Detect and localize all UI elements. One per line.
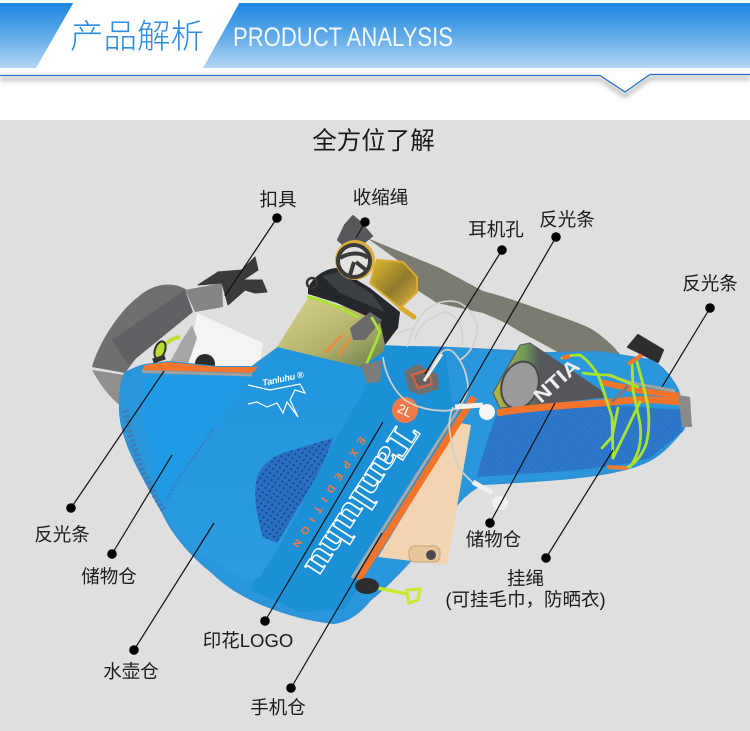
bottle neck cord [308,297,357,317]
phone camera [409,546,440,562]
right tab [678,395,692,427]
callout: 储物仓 left: 储物仓 [81,566,137,587]
left pocket piping [125,410,165,512]
callout: 手机仓 [250,533,382,718]
right pocket zipper [497,375,680,413]
waist bag illustration [92,216,692,623]
hanging cords [562,355,649,468]
callout: 反光条 middle [460,209,595,403]
cord stopper [628,335,663,364]
callout: 水壶仓: 水壶仓 [103,661,159,682]
small cap loop [307,278,317,288]
header divider with notch [0,74,750,96]
right mesh pocket [477,405,683,477]
earbud bottom [473,482,508,510]
holder logo: Tanluhu ® [261,369,305,388]
callout: 反光条 left [34,371,164,545]
holder seam [166,430,213,500]
yellow lid [370,260,417,317]
nozzle [335,240,375,280]
earphone wires [383,301,477,483]
2L badge: 2L [395,401,415,420]
buckle [198,257,267,305]
tower print on tissue [170,325,197,364]
phone pocket orange zipper [352,397,474,580]
cord lock on bottle [350,312,382,383]
callout: 手机仓: 手机仓 [250,697,306,718]
callout: 储物仓 left [81,455,172,587]
callout: 反光条 middle: 反光条 [539,209,595,230]
callout: 扣具: 扣具 [259,189,297,210]
callout: 挂绳: (可挂毛巾，防晒衣) [445,589,606,610]
callout: 挂绳: 挂绳 [507,568,544,589]
EXPEDITION print: EXPEDITION [290,434,368,549]
large print Tanluhu: Tanluhu [297,415,427,585]
gel card [493,343,605,414]
callout: 扣具 [225,189,297,296]
phone [378,423,471,565]
callout: 反光条 left: 反光条 [34,524,90,545]
left strap [92,283,223,410]
2L badge [392,397,418,423]
tissue in left pocket [188,313,263,369]
callout: 反光条 right: 反光条 [682,273,738,294]
bottle cap [308,268,400,345]
bottle holder pocket [163,347,368,580]
callout: 印花LOGO [203,422,383,651]
callout: 收缩绳 [353,187,408,238]
black print on tissue [195,354,215,374]
callout: 耳机孔: 耳机孔 [468,219,524,240]
left pocket panel [142,374,258,510]
callout: 水壶仓 [103,523,214,682]
ear port [405,354,442,394]
bottle inner orange straw [325,335,350,356]
earbud top [455,404,495,420]
callout: 耳机孔 [425,219,524,374]
cap highlight [322,272,385,312]
left zipper pull [152,337,180,361]
left pocket zipper strip [142,362,258,375]
top buckle [338,216,372,246]
header title chinese: 产品解析 [70,9,204,58]
main bag body [120,345,685,623]
header banner [0,0,750,68]
front panel with print [250,345,470,612]
callout: 储物仓 right: 储物仓 [466,529,521,550]
gel card text: NTIA [530,355,584,408]
header title english: PRODUCT ANALYSIS [233,22,453,52]
bottle body [277,298,393,367]
callout: 收缩绳: 收缩绳 [353,187,408,208]
phone zipper pull [355,578,420,603]
callout: 储物仓 right [466,403,555,550]
right strap [367,238,622,357]
callout: 挂绳 [445,450,613,610]
holder logo [248,369,305,417]
panel title: 全方位了解 [312,127,435,155]
callout: 反光条 right [662,273,738,387]
mesh pocket [255,438,333,543]
callout: 印花LOGO: 印花LOGO [203,630,293,651]
